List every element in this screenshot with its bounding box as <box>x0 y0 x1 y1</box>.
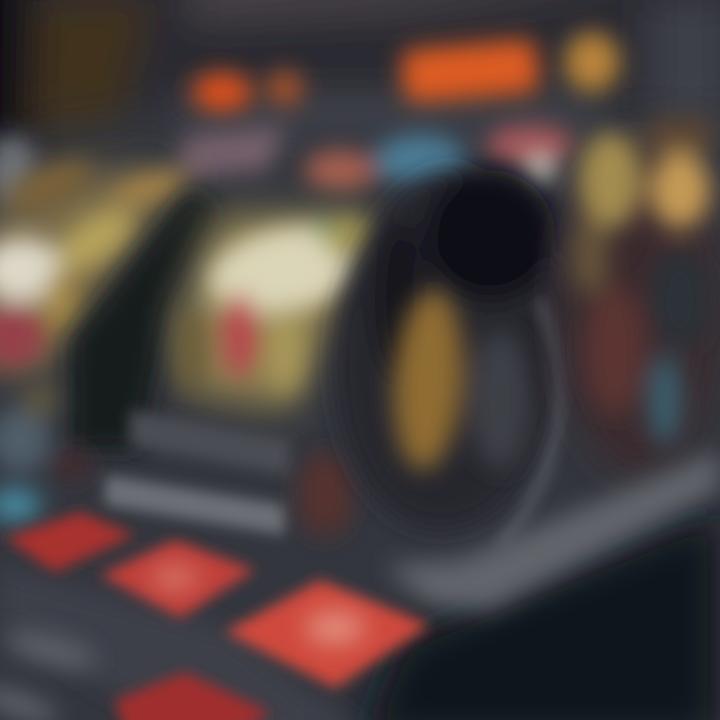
centre reel <box>180 215 380 410</box>
lower right console <box>360 510 720 720</box>
wheel rim <box>500 300 560 545</box>
black wheel <box>320 161 580 539</box>
gold oval <box>388 288 530 472</box>
red buttons <box>5 512 430 720</box>
dark pillar between reels <box>70 190 220 450</box>
mid panels under lights <box>0 125 574 205</box>
button highlights <box>0 566 365 720</box>
orange lights <box>192 32 620 112</box>
left reel <box>0 170 190 370</box>
grey diagonal ledge <box>0 450 720 720</box>
lower machine panels <box>105 410 290 535</box>
top dark band <box>0 0 720 150</box>
right reel <box>560 145 720 475</box>
